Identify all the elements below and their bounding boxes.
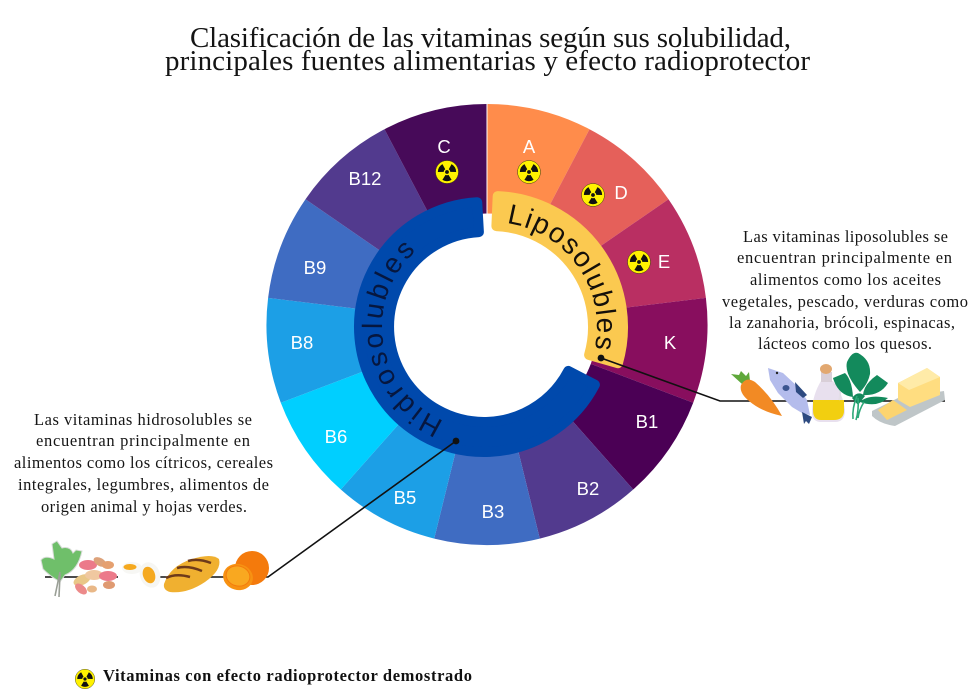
divider between C and A bbox=[486, 104, 488, 214]
connector: liposolubles to foods bbox=[598, 355, 945, 401]
arc: hidrosolubles bbox=[354, 197, 600, 457]
vitamin labels: K bbox=[664, 332, 677, 353]
vitamin labels: B1 bbox=[636, 411, 658, 432]
vitamin labels: B8 bbox=[291, 332, 313, 353]
food icons: liposolubles bbox=[731, 353, 945, 426]
wedge: B8 bbox=[266, 298, 383, 403]
vitamin wheel bbox=[266, 104, 708, 546]
wedge: C bbox=[384, 104, 487, 226]
icon: radioprotector A bbox=[518, 160, 540, 184]
title bbox=[165, 22, 810, 77]
vitamin labels: B3 bbox=[482, 501, 504, 522]
text: liposolubles description: encuentran principalmente en bbox=[737, 248, 952, 267]
icon: oil bottle bbox=[812, 364, 845, 422]
text: hidrosolubles description bbox=[14, 410, 273, 516]
vitamin labels: B12 bbox=[349, 168, 381, 189]
icon: radioprotector D bbox=[582, 184, 604, 206]
connector: hidrosolubles to foods bbox=[45, 438, 459, 577]
vitamin labels: C bbox=[437, 136, 451, 157]
wedge: A bbox=[487, 104, 590, 226]
food icons: hidrosolubles bbox=[41, 541, 269, 597]
icon: fish bbox=[768, 368, 812, 424]
text: hidrosolubles description: origen animal y hojas verdes. bbox=[41, 497, 247, 516]
icon: radioprotector E bbox=[628, 250, 650, 274]
icon: legend radioprotector bbox=[75, 669, 95, 689]
text: liposolubles description: Las vitaminas liposolubles se bbox=[743, 227, 948, 246]
icon: spinach leaf bbox=[41, 541, 82, 597]
icon: nuts bbox=[72, 555, 117, 597]
text: hidrosolubles description: integrales, legumbres, alimentos de bbox=[18, 475, 269, 494]
icon: butter bbox=[872, 368, 945, 426]
icon: eggs bbox=[118, 559, 164, 591]
wedge: B9 bbox=[268, 199, 396, 311]
wedge: B1 bbox=[561, 364, 693, 490]
wedge: E bbox=[578, 199, 706, 311]
wedge: B6 bbox=[281, 364, 413, 490]
icon: bread bbox=[164, 556, 219, 592]
text: hidrosolubles description: encuentran principalmente en bbox=[36, 431, 250, 450]
wedge: B2 bbox=[514, 408, 633, 539]
text: liposolubles description: lácteos como los quesos. bbox=[758, 334, 932, 353]
wedge: B3 bbox=[434, 432, 540, 545]
vitamin labels: E bbox=[658, 251, 670, 272]
wedge: B5 bbox=[341, 408, 460, 539]
vitamin labels: B5 bbox=[394, 487, 416, 508]
wedge: K bbox=[591, 298, 708, 403]
icon: radioprotector C bbox=[436, 160, 458, 184]
title: principales fuentes alimentarias y efecto radioprotector bbox=[165, 45, 810, 77]
text: liposolubles description: la zanahoria, brócoli, espinacas, bbox=[729, 313, 955, 332]
vitamin labels: D bbox=[614, 182, 628, 203]
vitamin labels: A bbox=[523, 136, 536, 157]
vitamin labels: B6 bbox=[325, 426, 347, 447]
wedge: B12 bbox=[306, 129, 435, 261]
text: hidrosolubles description: alimentos como los cítricos, cereales bbox=[14, 453, 273, 472]
wedge: D bbox=[539, 129, 668, 261]
text: liposolubles description: alimentos como los aceites bbox=[750, 270, 941, 289]
arc: hidrosolubles: Hidrosolubles bbox=[362, 242, 442, 437]
arc: liposolubles: Liposolubles bbox=[508, 204, 616, 350]
vitamin labels: B9 bbox=[304, 257, 326, 278]
vitamin labels: B2 bbox=[577, 478, 599, 499]
icon: orange bbox=[220, 551, 269, 593]
icon: carrot bbox=[731, 371, 782, 416]
vitamin labels bbox=[291, 136, 677, 522]
text: liposolubles description bbox=[722, 227, 968, 353]
legend bbox=[75, 666, 472, 689]
legend text: Vitaminas con efecto radioprotector demostrado bbox=[103, 666, 472, 685]
icon: spinach bbox=[833, 353, 888, 420]
text: liposolubles description: vegetales, pescado, verduras como bbox=[722, 292, 968, 311]
title: Clasificación de las vitaminas según sus solubilidad, bbox=[190, 22, 791, 54]
text: hidrosolubles description: Las vitaminas hidrosolubles se bbox=[34, 410, 252, 429]
